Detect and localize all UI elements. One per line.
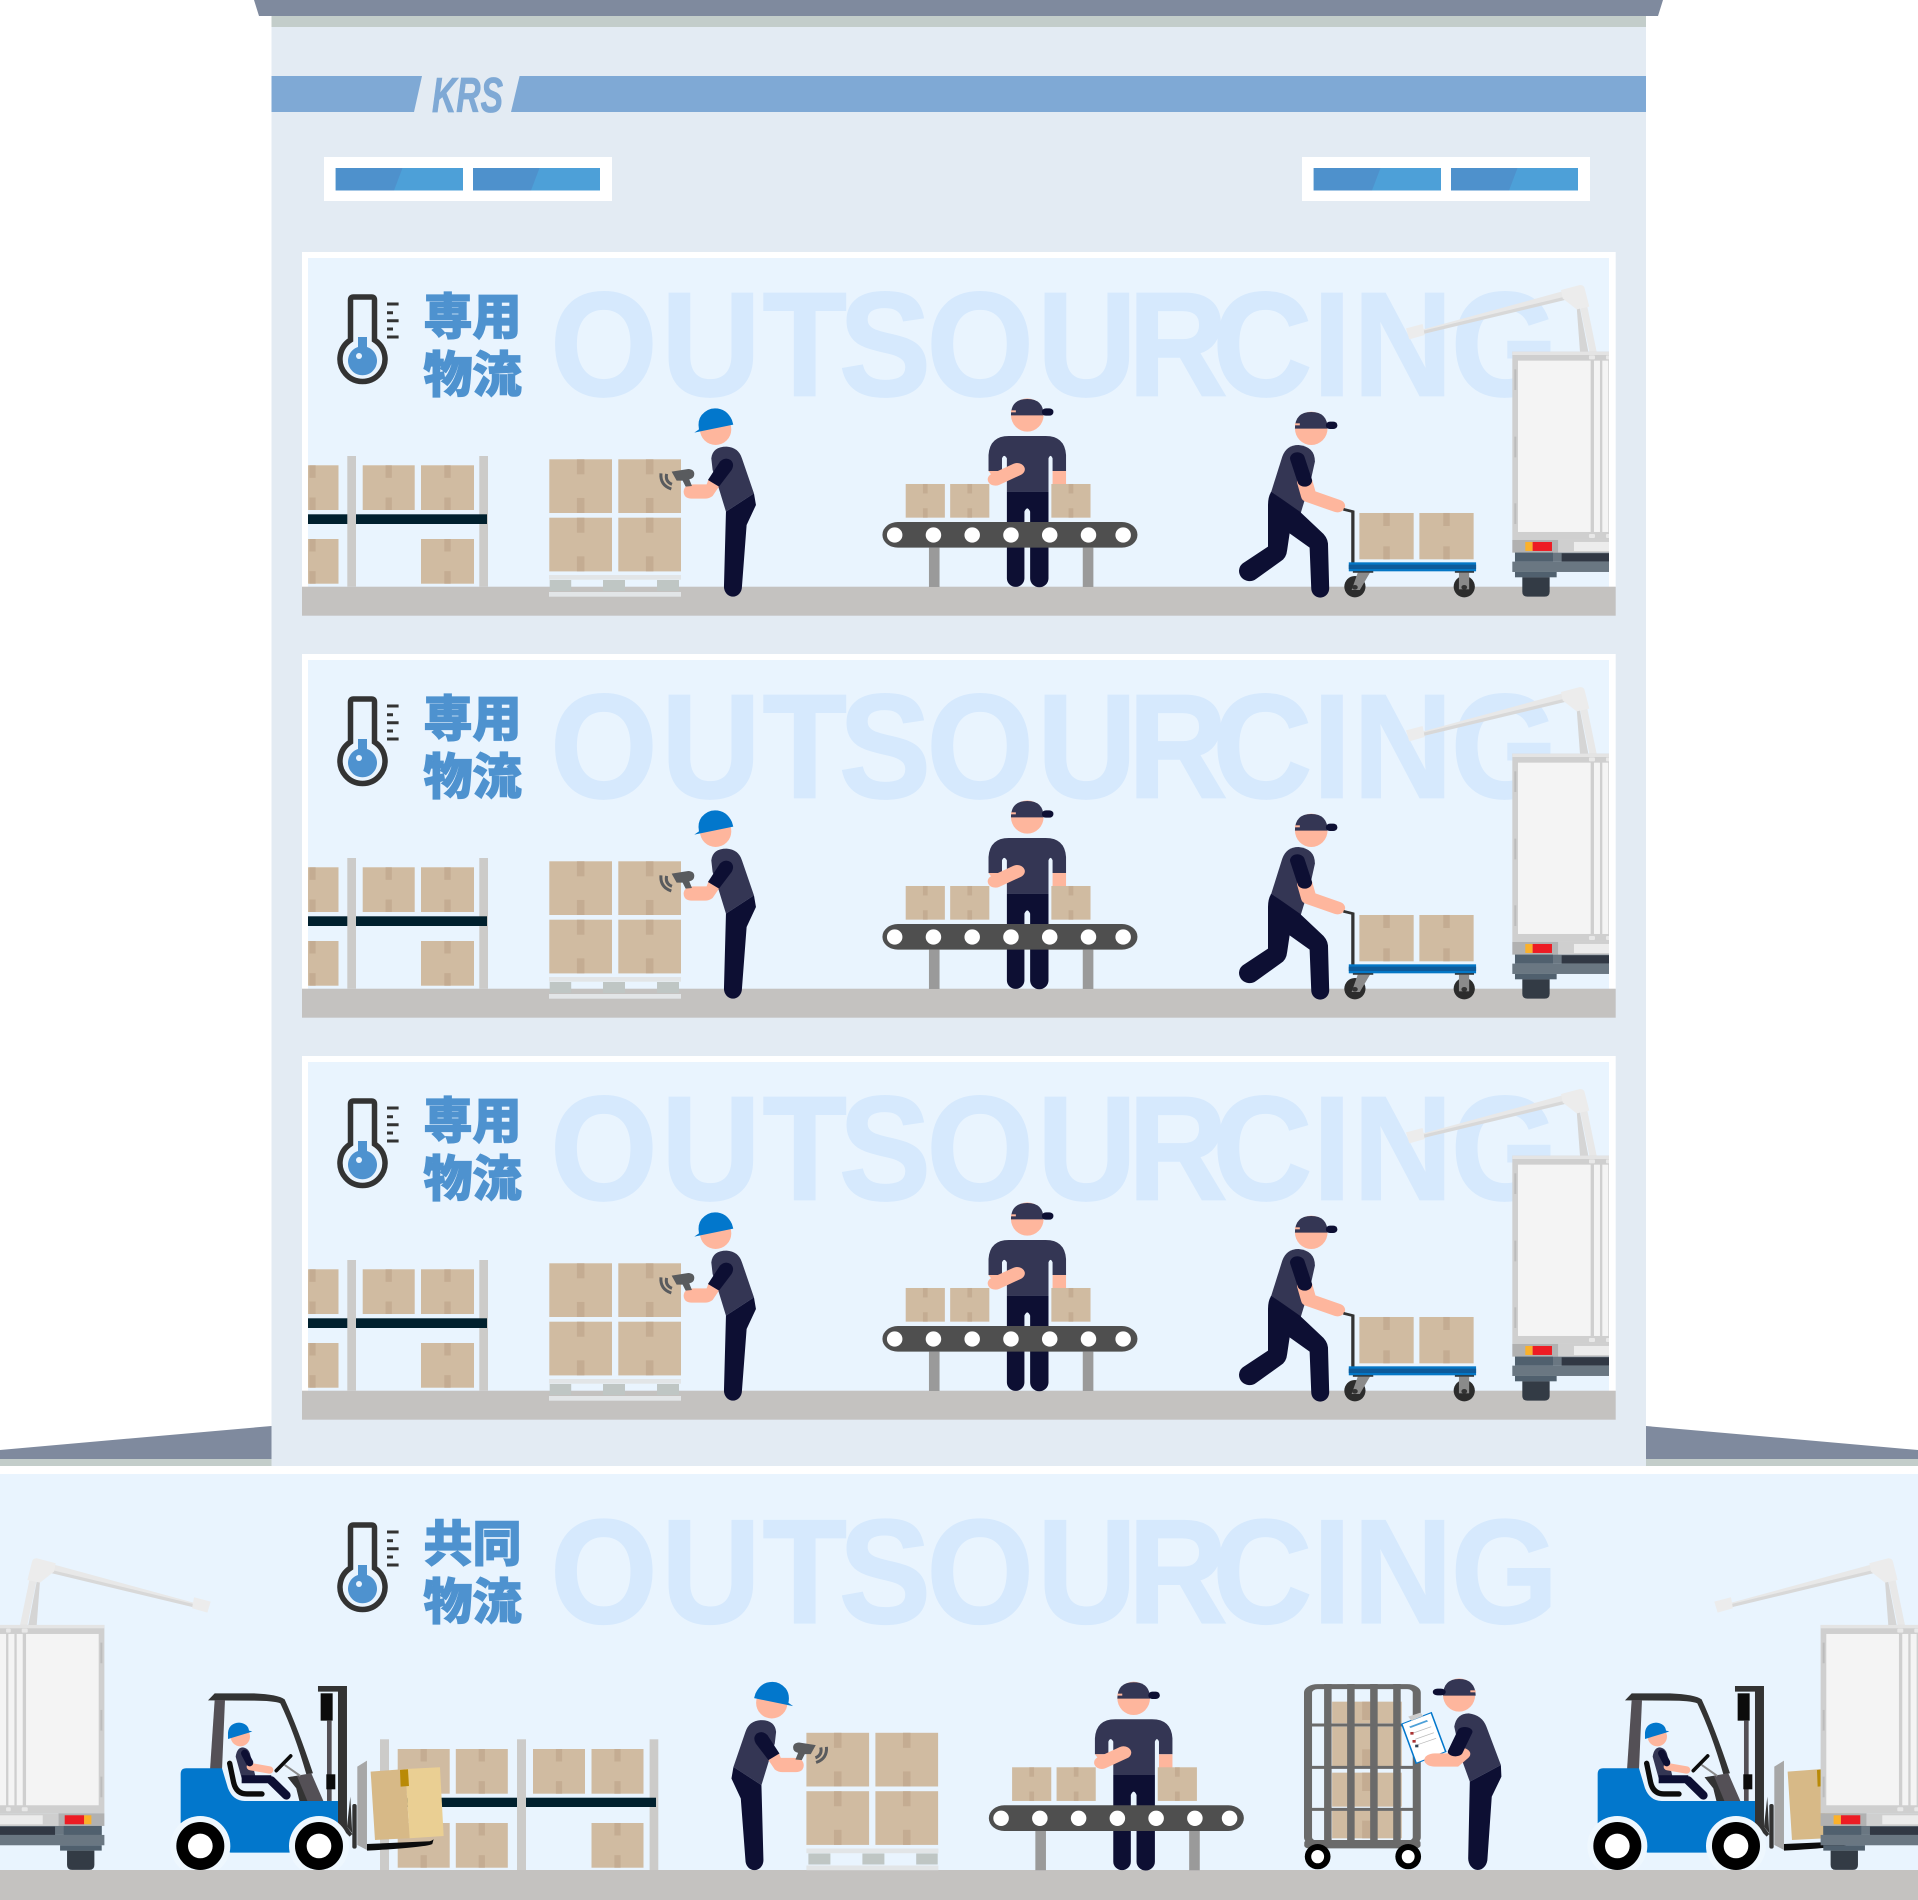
truck [1406, 285, 1620, 597]
clipboard [1402, 1713, 1446, 1763]
side roof left [0, 1426, 272, 1466]
watermark text: OUTSOURCING [550, 1067, 1558, 1232]
watermark text: OUTSOURCING [550, 263, 1558, 428]
heading: dedicated logistics: 専用 [424, 693, 522, 747]
heading: shared logistics: 物流 [424, 1576, 522, 1630]
storage shelf [308, 1260, 488, 1390]
watermark text: OUTSOURCING [550, 665, 1558, 830]
heading: dedicated logistics: 物流 [424, 751, 522, 805]
heading: dedicated logistics: 物流 [424, 349, 522, 403]
worker scanning pallet [549, 408, 756, 597]
icon: thermometer [340, 1101, 399, 1186]
conveyor with worker [989, 1682, 1244, 1871]
worker scanning pallet [731, 1682, 938, 1870]
building wall [272, 27, 1646, 1466]
heading: dedicated logistics: 物流 [424, 1153, 522, 1207]
conveyor with worker [882, 800, 1137, 989]
panel: floor 2 [286, 654, 1620, 1018]
roll cage with worker and clipboard [1304, 1678, 1501, 1870]
heading: dedicated logistics: 専用 [424, 291, 522, 345]
icon: thermometer [340, 1525, 399, 1610]
panel: floor 3 [286, 252, 1620, 616]
logo text: KRS [432, 69, 503, 123]
left window [324, 157, 612, 201]
icon: thermometer [340, 297, 399, 382]
roof [254, 0, 1663, 27]
conveyor with worker [882, 1202, 1137, 1391]
worker pushing cart [1239, 412, 1476, 598]
worker scanning pallet [549, 1212, 756, 1401]
truck [1406, 1089, 1620, 1401]
storage shelf [308, 456, 488, 586]
truck right [1714, 1558, 1918, 1870]
cage [1304, 1684, 1421, 1869]
icon: thermometer [340, 699, 399, 784]
storage shelf [308, 858, 488, 988]
conveyor with worker [882, 398, 1137, 587]
storage shelf [380, 1739, 658, 1870]
watermark text: OUTSOURCING [550, 1490, 1558, 1655]
heading: shared logistics: 共同 [424, 1518, 522, 1572]
heading: dedicated logistics: 専用 [424, 1095, 522, 1149]
truck left [0, 1558, 211, 1870]
truck [1406, 687, 1620, 999]
forklift left [170, 1686, 444, 1876]
right window [1302, 157, 1590, 201]
worker [1402, 1678, 1501, 1870]
panel: floor 1 [286, 1056, 1620, 1420]
panel: ground floor shared logistics [0, 1474, 1918, 1900]
worker pushing cart [1239, 1216, 1476, 1402]
side roof right [1646, 1426, 1918, 1466]
company sign band [272, 69, 1646, 123]
forklift right [1587, 1686, 1861, 1876]
worker scanning pallet [549, 810, 756, 999]
worker pushing cart [1239, 814, 1476, 1000]
